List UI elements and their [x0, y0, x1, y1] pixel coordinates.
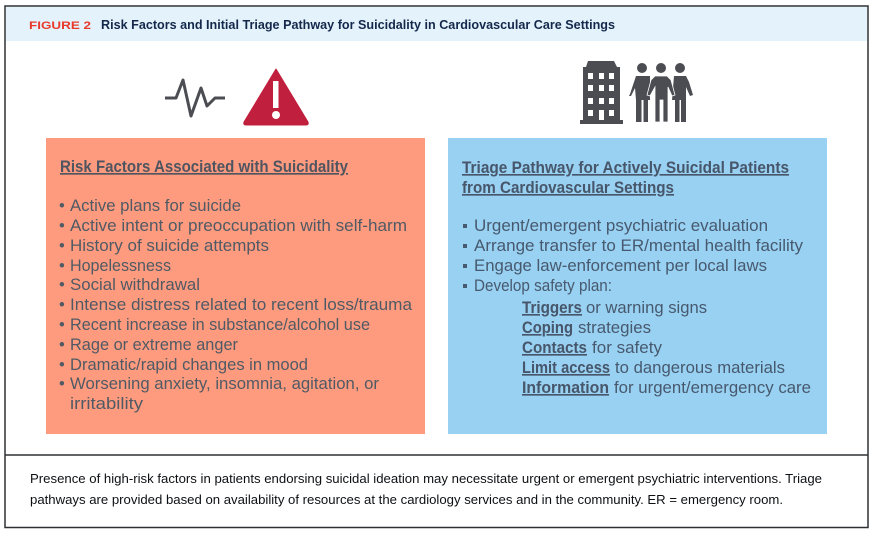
icon: hospital building [580, 61, 623, 124]
panel: risk factors [46, 138, 425, 434]
list: risk factors: Social withdrawal [70, 276, 200, 294]
list: safety plan: Information [522, 379, 609, 397]
list: risk factors: • [59, 356, 65, 374]
caption [30, 471, 822, 507]
heading: triage pathway: from Cardiovascular Settings [462, 179, 674, 197]
list: safety plan: or warning signs [586, 299, 707, 317]
title: Risk Factors and Initial Triage Pathway for Suicidality in Cardiovascular Care Settings [101, 18, 615, 32]
list: risk factors: • [59, 217, 65, 235]
list: risk factors: • [59, 296, 65, 314]
list: safety plan: Contacts [522, 339, 587, 357]
panel: triage pathway [448, 138, 827, 434]
figure label: FIGURE 2 [29, 20, 91, 32]
heading: risk factors: Risk Factors Associated with Suicidality [60, 158, 349, 176]
list: risk factors: irritability [70, 395, 144, 413]
list: risk factors: Hopelessness [70, 257, 171, 275]
list: risk factors: • [59, 257, 65, 275]
icon: group of people [629, 63, 693, 122]
list: risk factors: • [59, 197, 65, 215]
list: safety plan: Limit access [522, 359, 610, 377]
list: triage steps: Urgent/emergent psychiatric evaluation [474, 217, 768, 235]
caption: pathways are provided based on availability of resources at the cardiology services and in the community. ER = emergency room. [30, 492, 783, 507]
list: risk factors: • [59, 375, 65, 393]
heading: triage pathway [462, 159, 789, 197]
list: risk factors: Active plans for suicide [70, 197, 241, 215]
list: triage steps: Develop safety plan: [474, 277, 612, 295]
list: risk factors: Active intent or preoccupation with self-harm [70, 217, 407, 235]
list: risk factors: • [59, 336, 65, 354]
list: risk factors: • [59, 237, 65, 255]
list: safety plan: for safety [592, 339, 663, 357]
list: risk factors: Worsening anxiety, insomnia, agitation, or [70, 375, 379, 393]
list: risk factors: • [59, 276, 65, 294]
list: risk factors: Intense distress related to recent loss/trauma [70, 296, 413, 314]
header band [6, 7, 867, 41]
icon: warning triangle [244, 69, 308, 125]
list: safety plan: strategies [578, 319, 651, 337]
list: triage steps: Engage law-enforcement per local laws [474, 257, 767, 275]
list: risk factors [59, 197, 413, 413]
list: risk factors: History of suicide attempts [70, 237, 269, 255]
list: risk factors: • [59, 316, 65, 334]
list: safety plan: Coping [522, 319, 573, 337]
list: triage steps: Arrange transfer to ER/mental health facility [474, 237, 804, 255]
list: safety plan [522, 299, 811, 397]
list: risk factors: Rage or extreme anger [70, 336, 238, 354]
list: safety plan: for urgent/emergency care [614, 379, 811, 397]
caption: Presence of high-risk factors in patients endorsing suicidal ideation may necessitate urgent or emergent psychiatric interventions. Triage [30, 471, 822, 486]
list: safety plan: Triggers [522, 299, 582, 317]
list: risk factors: Recent increase in substance/alcohol use [70, 316, 370, 334]
list: triage steps [463, 217, 804, 295]
heading: triage pathway: Triage Pathway for Actively Suicidal Patients [462, 159, 789, 177]
list: safety plan: to dangerous materials [615, 359, 785, 377]
icon: heartbeat line [165, 80, 225, 116]
list: risk factors: Dramatic/rapid changes in mood [70, 356, 308, 374]
